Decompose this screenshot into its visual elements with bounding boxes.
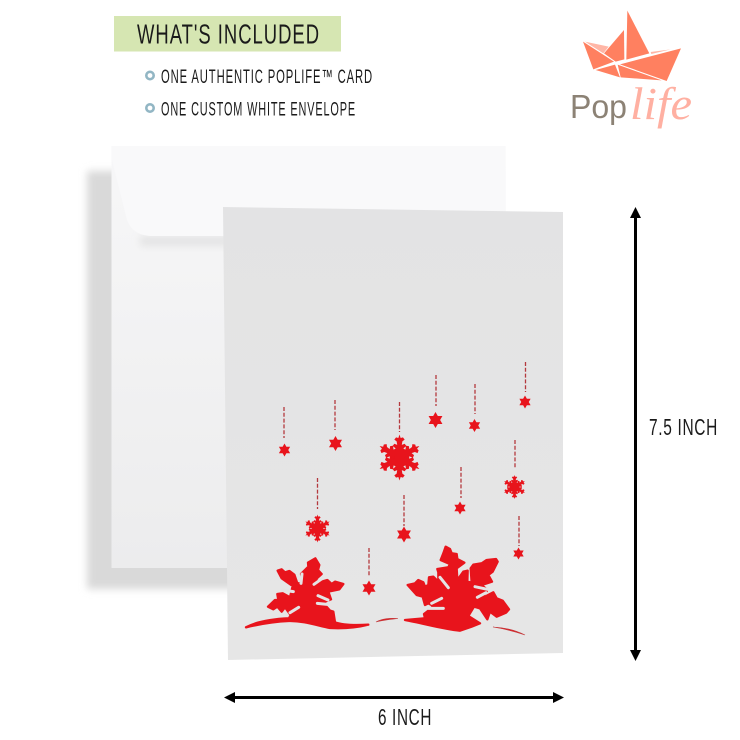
item: card: ONE AUTHENTIC POPLIFE™ CARD: [161, 67, 373, 88]
envelope body: [112, 146, 506, 568]
item: envelope: ONE CUSTOM WHITE ENVELOPE: [161, 100, 356, 120]
envelope shadow: [87, 171, 247, 589]
greeting card: [223, 207, 563, 660]
flap shadow: [140, 236, 230, 246]
included items list: [146, 67, 373, 120]
card face: [223, 207, 563, 660]
small snowflakes: [376, 434, 423, 480]
icon: origami boat: [583, 11, 681, 81]
right large snowflake on snow: [405, 547, 509, 631]
item: card: [146, 67, 373, 88]
dimension: height arrow: [630, 207, 641, 661]
dimension label: 6 inch: 6 INCH: [378, 704, 432, 730]
snow line segments: [376, 618, 525, 635]
stars: [279, 444, 290, 456]
item: envelope: [146, 100, 356, 120]
envelope flap: [112, 146, 505, 236]
heading: what's included: [114, 16, 341, 52]
hanging ornaments: [279, 362, 531, 596]
left large snowflake on snow: [246, 558, 368, 628]
wordmark: [570, 78, 692, 129]
wordmark: Pop: [570, 88, 627, 125]
dimension: width arrow: [224, 692, 564, 703]
logo: Poplife: [570, 11, 692, 129]
envelope: [87, 146, 506, 589]
wordmark: life: [630, 78, 692, 129]
heading: what's included: WHAT'S INCLUDED: [137, 18, 320, 50]
dashed strings: [284, 362, 526, 577]
